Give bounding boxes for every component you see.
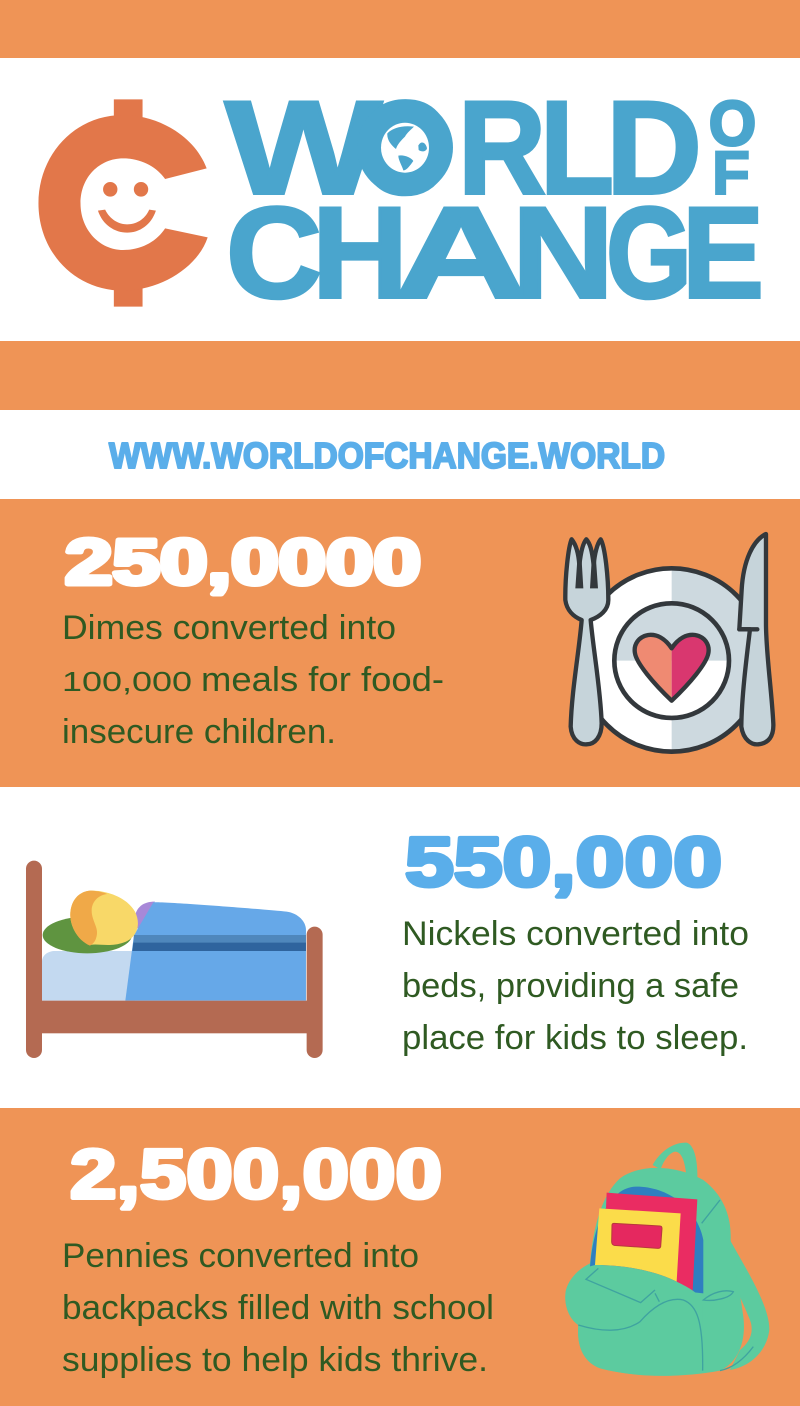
logo word: CHANGE: N: [512, 180, 614, 326]
panel: pennies and backpacks: [0, 1108, 800, 1406]
text: dimes description: Dimes converted into: [62, 609, 396, 647]
text: pennies description: [62, 1237, 494, 1379]
logo word: WORLD: [225, 74, 702, 222]
text: dimes description: meals for food-: [201, 661, 444, 699]
text: dimes description: [62, 609, 444, 751]
logo word: CHANGE: E: [682, 180, 764, 326]
icon: plate with heart, fork and knife: [565, 534, 773, 752]
logo word: CHANGE: G: [606, 180, 692, 326]
logo word: CHANGE: A: [394, 180, 528, 326]
website address: WWW.WORLDOFCHANGE.WORLD: [109, 435, 665, 476]
text: dimes description: 100,000: [62, 666, 192, 697]
logo word: WORLD: O: [358, 74, 453, 222]
logo word: WORLD: L: [540, 74, 614, 222]
icon: smiling cent symbol: [38, 99, 208, 307]
logo word: OF: O: [709, 89, 756, 159]
icon: child sleeping in bed: [26, 861, 323, 1058]
panel: nickels and beds: [0, 787, 800, 1108]
logo word: WORLD: W: [225, 74, 383, 222]
logo word: CHANGE: H: [312, 180, 408, 326]
text: pennies description: backpacks filled with school: [62, 1289, 494, 1327]
text: nickels description: place for kids to sleep.: [402, 1019, 748, 1057]
stat: 550,000: 550,000: [405, 823, 722, 901]
stat: 2,500,000: 2,500,000: [70, 1135, 442, 1213]
top orange band: [0, 0, 800, 58]
orange band under logo: [0, 341, 800, 410]
stat: 250,0000: 250,0000: [65, 526, 421, 598]
text: pennies description: Pennies converted into: [62, 1237, 419, 1275]
text: dimes description: insecure children.: [62, 713, 336, 751]
logo word: OF: F: [712, 139, 750, 207]
logo word: CHANGE: [226, 180, 764, 326]
text: nickels description: Nickels converted into: [402, 915, 749, 953]
text: nickels description: beds, providing a safe: [402, 967, 739, 1005]
icon: globe in the letter O: [357, 100, 453, 196]
text: nickels description: [402, 915, 749, 1057]
logo word: OF: [709, 89, 756, 207]
text: pennies description: supplies to help kids thrive.: [62, 1341, 488, 1379]
panel: dimes and meals: [0, 499, 800, 787]
panel: logo header: [0, 58, 800, 341]
logo word: CHANGE: C: [226, 180, 322, 326]
icon: backpack with notebooks: [565, 1143, 769, 1376]
logo word: WORLD: D: [606, 74, 702, 222]
logo word: WORLD: R: [458, 74, 546, 222]
